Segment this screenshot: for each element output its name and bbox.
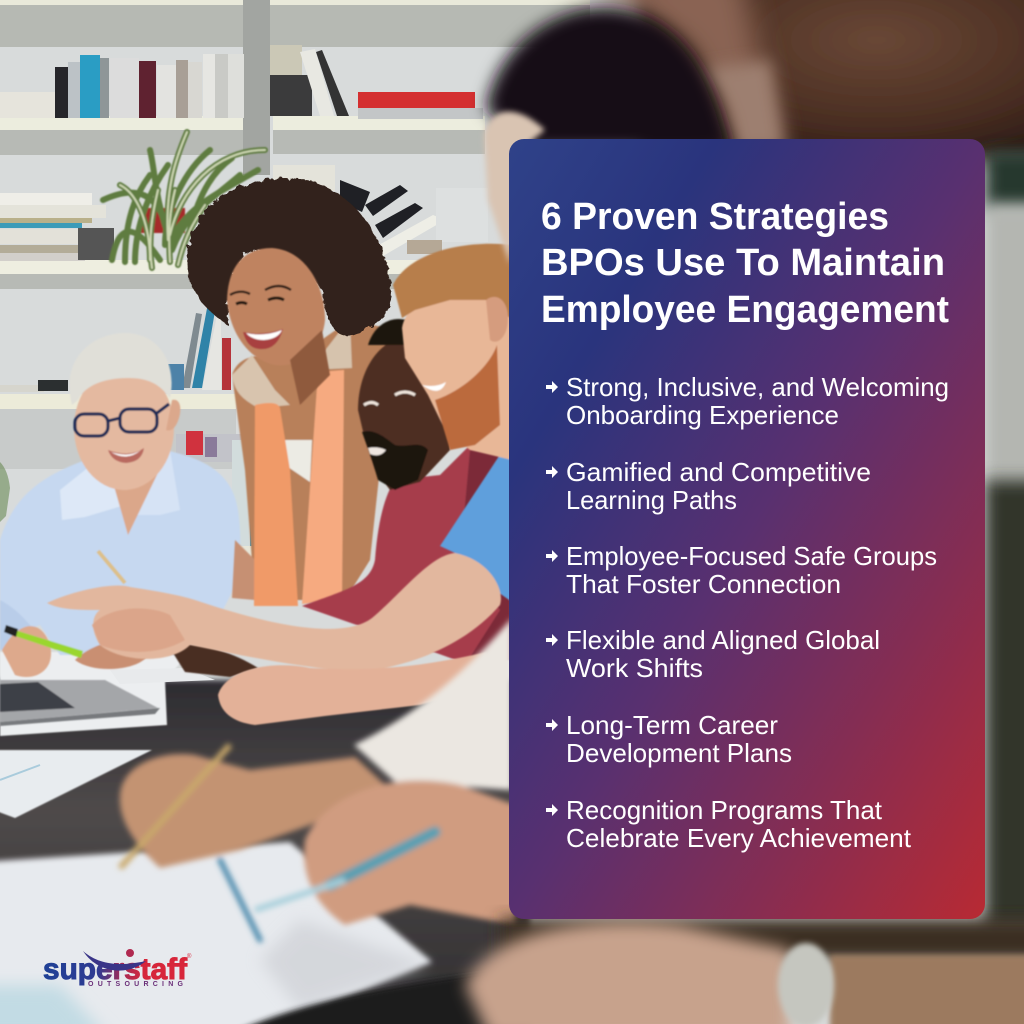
list item 1: Onboarding Experience [566, 400, 839, 430]
blurred foreground right side [465, 0, 1024, 1024]
middle shelf books [0, 193, 92, 205]
list item 3: Employee-Focused Safe Groups [566, 541, 937, 571]
list item 3 [546, 541, 937, 599]
person: woman with glasses [0, 333, 240, 677]
afro hair [187, 178, 390, 336]
logo: superstaff outsourcing: OUTSOURCING [88, 981, 184, 988]
panel: strategies [509, 139, 985, 919]
hands and pen [2, 626, 51, 677]
papers under laptop [0, 652, 190, 736]
title: 6 Proven Strategies [541, 196, 889, 238]
list item 2 [546, 457, 871, 515]
face [227, 248, 330, 405]
title: Employee Engagement [541, 289, 949, 331]
person: red-haired man in blue shirt [47, 244, 512, 725]
list item 6: Recognition Programs That [566, 795, 883, 825]
list item 3: That Foster Connection [566, 569, 841, 599]
title [541, 196, 949, 331]
list item 6 [546, 795, 912, 853]
list item 6: Celebrate Every Achievement [566, 823, 912, 853]
logo: superstaff outsourcing: superstaff [43, 953, 188, 986]
list item 5: Development Plans [566, 738, 792, 768]
shirt [0, 450, 240, 655]
list item 5: Long-Term Career [566, 710, 778, 740]
lower shelf books [182, 313, 202, 388]
logo: superstaff outsourcing: ® [187, 953, 192, 960]
foreground paper [0, 842, 432, 1024]
top and arms [232, 318, 395, 606]
plant [103, 132, 265, 268]
table [0, 652, 530, 1024]
list item 4: Flexible and Aligned Global [566, 625, 880, 655]
person: man in maroon shirt [168, 319, 510, 677]
head [74, 366, 174, 490]
foreground white sleeve and hands [120, 618, 515, 942]
blurred paper top-left [0, 750, 152, 818]
list item 2: Gamified and Competitive [566, 457, 871, 487]
person: woman with afro [187, 178, 395, 606]
list item 2: Learning Paths [566, 485, 737, 515]
laptop [0, 680, 160, 726]
list item 1 [546, 372, 949, 430]
list item 1: Strong, Inclusive, and Welcoming [566, 372, 949, 402]
top shelf books [0, 92, 55, 118]
list item 4 [546, 625, 880, 683]
list item 4: Work Shifts [566, 653, 703, 683]
title: BPOs Use To Maintain [541, 242, 945, 284]
panel background [509, 139, 985, 919]
list item 5 [546, 710, 792, 768]
